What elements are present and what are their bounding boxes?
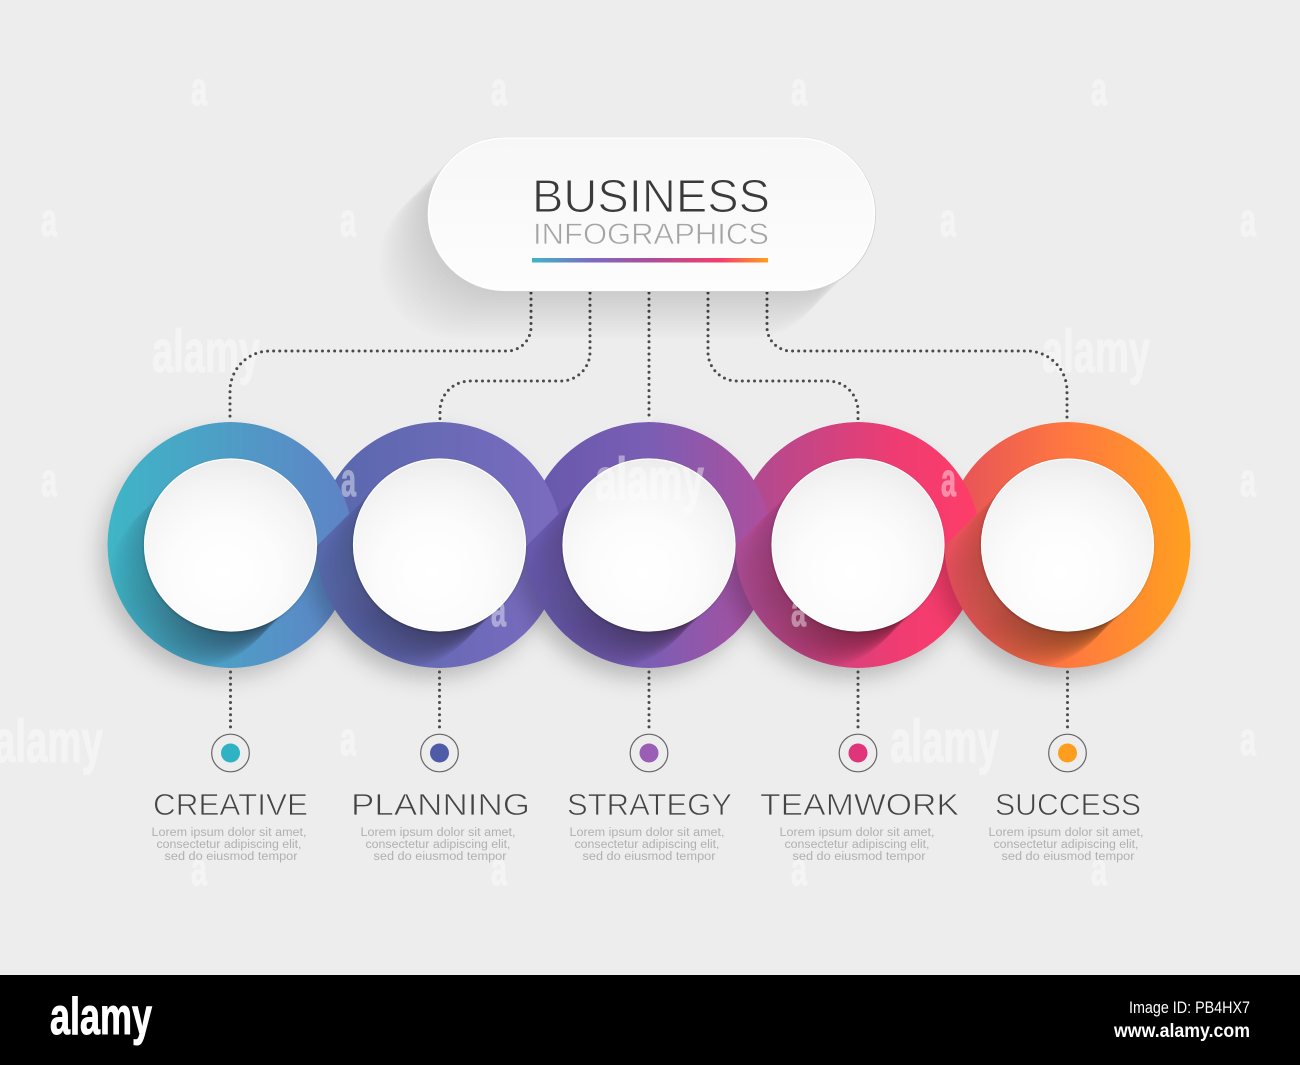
watermark over rings: a [341, 453, 356, 506]
watermarks [0, 62, 1257, 895]
marker 1 [212, 734, 249, 772]
description 2: sed do eiusmod tempor [374, 851, 507, 863]
ring 1 [100, 422, 354, 678]
description 2 [360, 827, 516, 863]
pill body [428, 138, 876, 292]
watermarks: a [791, 842, 808, 895]
description 4: consectetur adipiscing elit, [784, 839, 930, 851]
column 3: strategy [567, 734, 732, 863]
description 3: sed do eiusmod tempor [582, 851, 716, 863]
watermarks: a [1240, 453, 1257, 506]
watermark over rings: a [791, 583, 806, 636]
watermarks: a [791, 62, 808, 115]
column 2: planning [351, 734, 530, 863]
ring 5 [937, 422, 1190, 678]
description 5: consectetur adipiscing elit, [994, 839, 1138, 851]
pill title: BUSINESS [532, 170, 770, 222]
dotted connectors from title pill to rings [230, 293, 1067, 420]
disc contact shadows [144, 460, 1153, 632]
dotted connectors from rings to markers [230, 672, 1068, 731]
heading 2: PLANNING [351, 787, 530, 822]
ring 2 [309, 422, 562, 678]
ring 3 [518, 422, 772, 678]
description 3: consectetur adipiscing elit, [574, 839, 720, 851]
description 3: Lorem ipsum dolor sit amet, [570, 827, 724, 839]
watermarks: a [491, 842, 508, 895]
watermarks: a [41, 193, 58, 246]
marker 3 [630, 734, 668, 772]
description 2: consectetur adipiscing elit, [366, 839, 510, 851]
heading 4: TEAMWORK [760, 787, 959, 822]
heading 5: SUCCESS [995, 787, 1141, 822]
footer url: www.alamy.com [1113, 1021, 1250, 1042]
footer logo: alamy [50, 988, 152, 1046]
description 4: sed do eiusmod tempor [792, 851, 926, 863]
watermarks: a [191, 842, 208, 895]
gradient underline [532, 258, 768, 262]
watermarks: a [340, 193, 357, 246]
footer bar [0, 975, 1300, 1065]
marker 2 [421, 734, 458, 772]
watermark over rings: alamy [595, 446, 704, 513]
watermarks: alamy [152, 318, 260, 385]
description 4 [780, 827, 934, 863]
marker 5 [1049, 734, 1086, 772]
watermarks: alamy [890, 708, 999, 775]
marker 4 [839, 734, 877, 772]
watermarks: a [491, 62, 508, 115]
description 2: Lorem ipsum dolor sit amet, [360, 827, 516, 839]
pill subtitle: INFOGRAPHICS [533, 218, 769, 251]
description 3 [570, 827, 724, 863]
watermarks: alamy [1042, 318, 1150, 385]
watermarks: a [1240, 193, 1257, 246]
watermark over rings: a [941, 453, 956, 506]
description 5 [988, 827, 1144, 863]
column 1: creative [152, 734, 308, 863]
heading 1: CREATIVE [153, 787, 308, 822]
watermarks: a [1091, 62, 1108, 115]
watermarks: a [340, 712, 357, 765]
watermarks: a [1091, 842, 1108, 895]
watermarks: a [940, 193, 957, 246]
watermark over rings: a [491, 583, 506, 636]
watermarks: a [41, 453, 58, 506]
image id: Image ID: PB4HX7 [1129, 998, 1250, 1017]
interlock overlaps [316, 456, 977, 546]
heading 3: STRATEGY [567, 787, 732, 822]
description 5: Lorem ipsum dolor sit amet, [988, 827, 1144, 839]
watermarks: a [1240, 712, 1257, 765]
description 1 [152, 827, 306, 863]
pill long shadow [379, 140, 872, 339]
title pill [379, 138, 876, 339]
watermarks: a [191, 62, 208, 115]
description 5: sed do eiusmod tempor [1002, 851, 1135, 863]
inner white discs [144, 459, 1154, 631]
description 1: sed do eiusmod tempor [164, 851, 298, 863]
description 1: Lorem ipsum dolor sit amet, [152, 827, 306, 839]
watermark over rings [341, 446, 956, 636]
ring 4 [727, 422, 981, 678]
description 4: Lorem ipsum dolor sit amet, [780, 827, 934, 839]
description 1: consectetur adipiscing elit, [156, 839, 302, 851]
column 5: success [988, 734, 1144, 863]
column 4: teamwork [760, 734, 959, 863]
five interlocked rings [100, 422, 1190, 678]
